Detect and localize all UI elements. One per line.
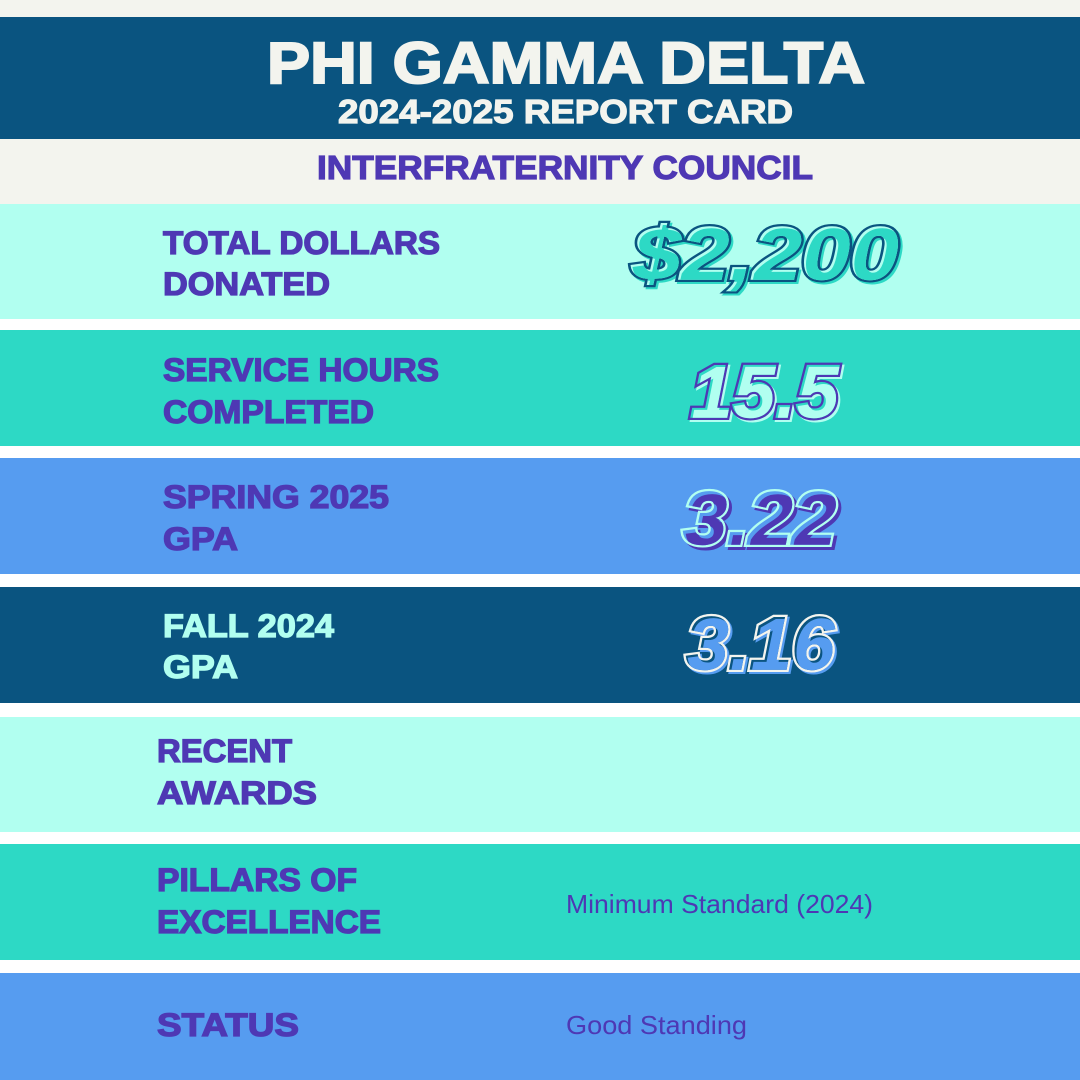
value: good standing: Good Standing (566, 1010, 747, 1040)
panel: recent awards: RECENT (157, 733, 292, 769)
value: 3.22: 3.22 (686, 480, 839, 563)
council heading: INTERFRATERNITY COUNCIL (317, 149, 813, 186)
panel: total dollars donated: TOTAL DOLLARS (163, 225, 440, 261)
value: 3.22: 3.22 (683, 477, 836, 560)
title: PHI GAMMA DELTA (267, 31, 865, 96)
subtitle: 2024-2025 REPORT CARD (338, 93, 793, 130)
panel: status (0, 973, 1080, 1080)
value: 15.5: 15.5 (692, 352, 842, 435)
panel: pillars of excellence: PILLARS OF (157, 862, 357, 898)
panel: recent awards: AWARDS (157, 775, 317, 811)
panel: service hours completed (0, 330, 1080, 446)
panel: status: STATUS (157, 1007, 299, 1043)
value: $2,200: $2,200 (631, 212, 898, 295)
panel: spring 2025 GPA: SPRING 2025 (163, 479, 389, 515)
panel: recent awards (0, 717, 1080, 832)
panel: pillars of excellence: EXCELLENCE (157, 904, 381, 940)
panel: service hours completed: COMPLETED (163, 394, 374, 430)
panel: total dollars donated: DONATED (163, 266, 330, 302)
value: minimum standard: Minimum Standard (2024) (566, 889, 873, 919)
header band (0, 17, 1080, 139)
panel: fall 2024 GPA: FALL 2024 (163, 608, 334, 644)
panel: service hours completed: SERVICE HOURS (163, 352, 439, 388)
value: $2,200: $2,200 (633, 214, 900, 297)
value: 3.22: 3.22 (686, 480, 839, 563)
value: 3.16: 3.16 (686, 602, 835, 685)
value: 3.16: 3.16 (686, 602, 835, 685)
panel: pillars of excellence (0, 844, 1080, 960)
panel: spring 2025 GPA (0, 458, 1080, 574)
panel: fall 2024 GPA: GPA (163, 649, 238, 685)
panel: fall 2024 GPA (0, 587, 1080, 703)
value: $2,200: $2,200 (633, 214, 900, 297)
value: 15.5: 15.5 (690, 350, 840, 433)
value: 3.22: 3.22 (683, 477, 836, 560)
value: 15.5: 15.5 (692, 352, 842, 435)
value: 3.22 (680, 488, 842, 550)
value: 15.5 (688, 362, 845, 422)
value: 15.5: 15.5 (690, 350, 840, 433)
value: 3.16: 3.16 (688, 604, 837, 687)
panel: spring 2025 GPA: GPA (163, 521, 238, 557)
value: 3.16 (683, 614, 840, 674)
panel: total dollars donated (0, 204, 1080, 319)
value: $2,200: $2,200 (631, 212, 898, 295)
value: 3.16: 3.16 (688, 604, 837, 687)
